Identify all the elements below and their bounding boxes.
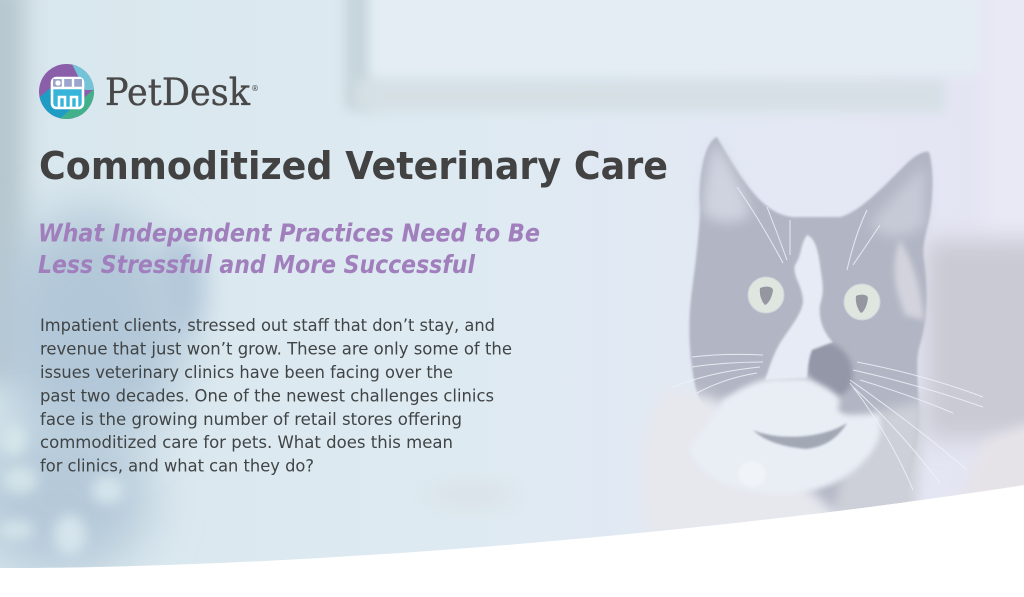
- right eye: [844, 284, 880, 320]
- photo: black and white cat: [673, 136, 983, 514]
- left eye: [748, 277, 784, 313]
- whiskers: [673, 187, 983, 490]
- registered mark: ®: [251, 84, 259, 93]
- dark nose and lip: [802, 341, 853, 396]
- intro paragraph: [40, 316, 512, 476]
- logo wordmark: PetDesk: [105, 71, 251, 114]
- subtitle line 1: What Independent Practices Need to Be: [38, 218, 540, 248]
- intro paragraph: Impatient clients, stressed out staff that don’t stay, and: [40, 316, 495, 336]
- title: Commoditized Veterinary Care: [39, 144, 668, 189]
- intro paragraph: face is the growing number of retail stores offering: [40, 410, 462, 430]
- intro paragraph: revenue that just won’t grow. These are only some of the: [40, 340, 512, 360]
- collar bell: [738, 461, 766, 487]
- hand holding cat: [696, 388, 838, 514]
- logo badge: [39, 64, 94, 119]
- pupil: [760, 287, 773, 305]
- left ear highlight: [703, 142, 750, 222]
- white muzzle and chest: [719, 376, 882, 492]
- pupil: [856, 295, 868, 313]
- iris: [844, 284, 880, 320]
- lower fur fade: [832, 400, 924, 511]
- subtitle: [38, 218, 540, 279]
- right ear highlight: [873, 172, 926, 237]
- cheek tuft: [895, 240, 924, 320]
- intro paragraph: commoditized care for pets. What does this mean: [40, 433, 453, 453]
- mouth markings: [753, 423, 847, 449]
- cat fur: [689, 137, 933, 530]
- logo: PetDesk: [39, 64, 258, 119]
- white blaze: [765, 235, 833, 380]
- intro paragraph: for clinics, and what can they do?: [40, 456, 314, 476]
- intro paragraph: past two decades. One of the newest challenges clinics: [40, 386, 494, 406]
- subtitle line 2: Less Stressful and More Successful: [38, 250, 476, 279]
- iris: [748, 277, 784, 313]
- intro paragraph: issues veterinary clinics have been facing over the: [40, 363, 453, 383]
